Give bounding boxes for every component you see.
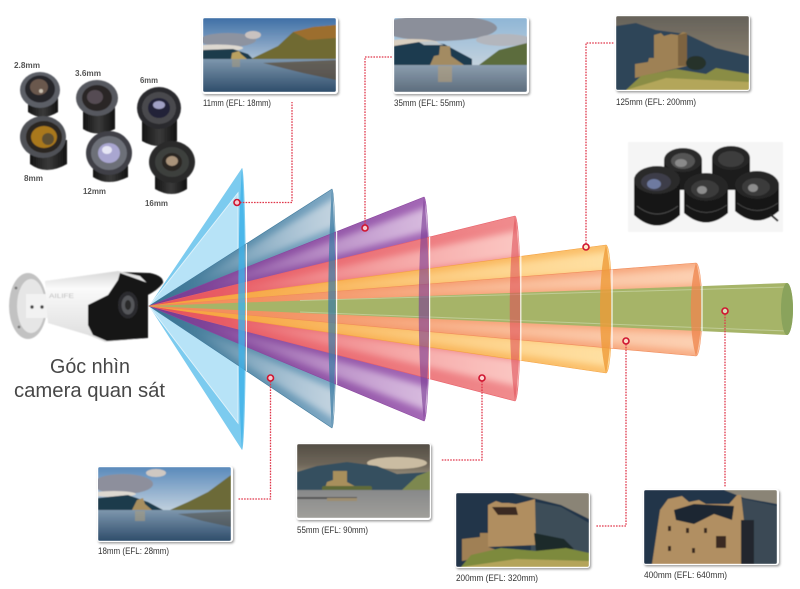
camera — [9, 271, 163, 342]
cone end white rims — [246, 232, 702, 385]
black front — [88, 273, 148, 341]
cone: 11mm blue — [149, 168, 246, 450]
lens front middle — [684, 173, 728, 222]
connector: 35mm — [362, 57, 392, 231]
photo card: 35mm — [381, 15, 532, 108]
photo card: 55mm — [296, 443, 431, 535]
lens size labels: 8mm — [24, 174, 43, 183]
lens size labels: 6mm — [140, 76, 158, 85]
camera lens — [118, 292, 138, 318]
lens 2.8mm — [20, 72, 60, 117]
lens size labels: 16mm — [145, 199, 168, 208]
camera caption: camera quan sát — [14, 380, 165, 402]
connector: 125mm — [583, 43, 614, 250]
lens 16mm — [149, 141, 195, 194]
lens size labels — [14, 61, 168, 208]
white body — [45, 271, 148, 342]
panel: lens set small — [20, 72, 195, 194]
connector: 55mm — [441, 375, 485, 460]
chart: nested view cones — [149, 168, 793, 450]
photo card: 200mm: 200mm (EFL: 320mm) — [456, 573, 538, 583]
connector: 11mm — [234, 102, 292, 206]
cone: 125mm orange — [149, 245, 612, 373]
connector: 400mm — [722, 308, 728, 487]
photo card: 35mm: 35mm (EFL: 55mm) — [394, 98, 465, 108]
photo card: 200mm — [455, 492, 590, 583]
photo card: 11mm: 11mm (EFL: 18mm) — [203, 98, 271, 108]
lens size labels: 2.8mm — [14, 61, 40, 70]
lens size labels: 12mm — [83, 187, 106, 196]
photo card: 125mm — [615, 15, 750, 107]
lens front right — [735, 171, 779, 221]
cone: 400mm green — [149, 283, 793, 335]
photo card: 400mm — [643, 489, 779, 580]
lens size labels: 3.6mm — [75, 69, 101, 78]
photo card: 125mm: 125mm (EFL: 200mm) — [616, 97, 696, 107]
camera caption: Góc nhìn — [50, 356, 130, 378]
lens 12mm — [86, 131, 132, 182]
camera caption — [14, 356, 165, 402]
photo card: 11mm — [191, 17, 338, 108]
cone: 35mm purple — [149, 197, 430, 421]
wall mount — [9, 273, 50, 339]
lens 8mm — [20, 116, 67, 170]
cone: 18mm steel blue — [149, 189, 336, 428]
photo card: 18mm: 18mm (EFL: 28mm) — [98, 546, 169, 556]
connector: 200mm — [596, 338, 629, 526]
lens back right — [712, 146, 750, 190]
hood — [118, 272, 163, 296]
cone end bands — [238, 168, 701, 450]
connector: 18mm — [238, 375, 274, 499]
lens front left — [634, 166, 680, 226]
lens back left — [664, 148, 702, 190]
photo card: 400mm: 400mm (EFL: 640mm) — [644, 570, 727, 580]
panel: lens set large — [628, 142, 783, 232]
cone: 55mm red — [149, 216, 521, 401]
cone: 200mm salmon — [149, 263, 702, 356]
lens 3.6mm — [76, 80, 118, 134]
photo card: 55mm: 55mm (EFL: 90mm) — [297, 525, 368, 535]
photo card: 18mm — [92, 466, 233, 556]
lens 6mm — [137, 87, 181, 146]
camera brand: AILIFE — [49, 293, 75, 300]
